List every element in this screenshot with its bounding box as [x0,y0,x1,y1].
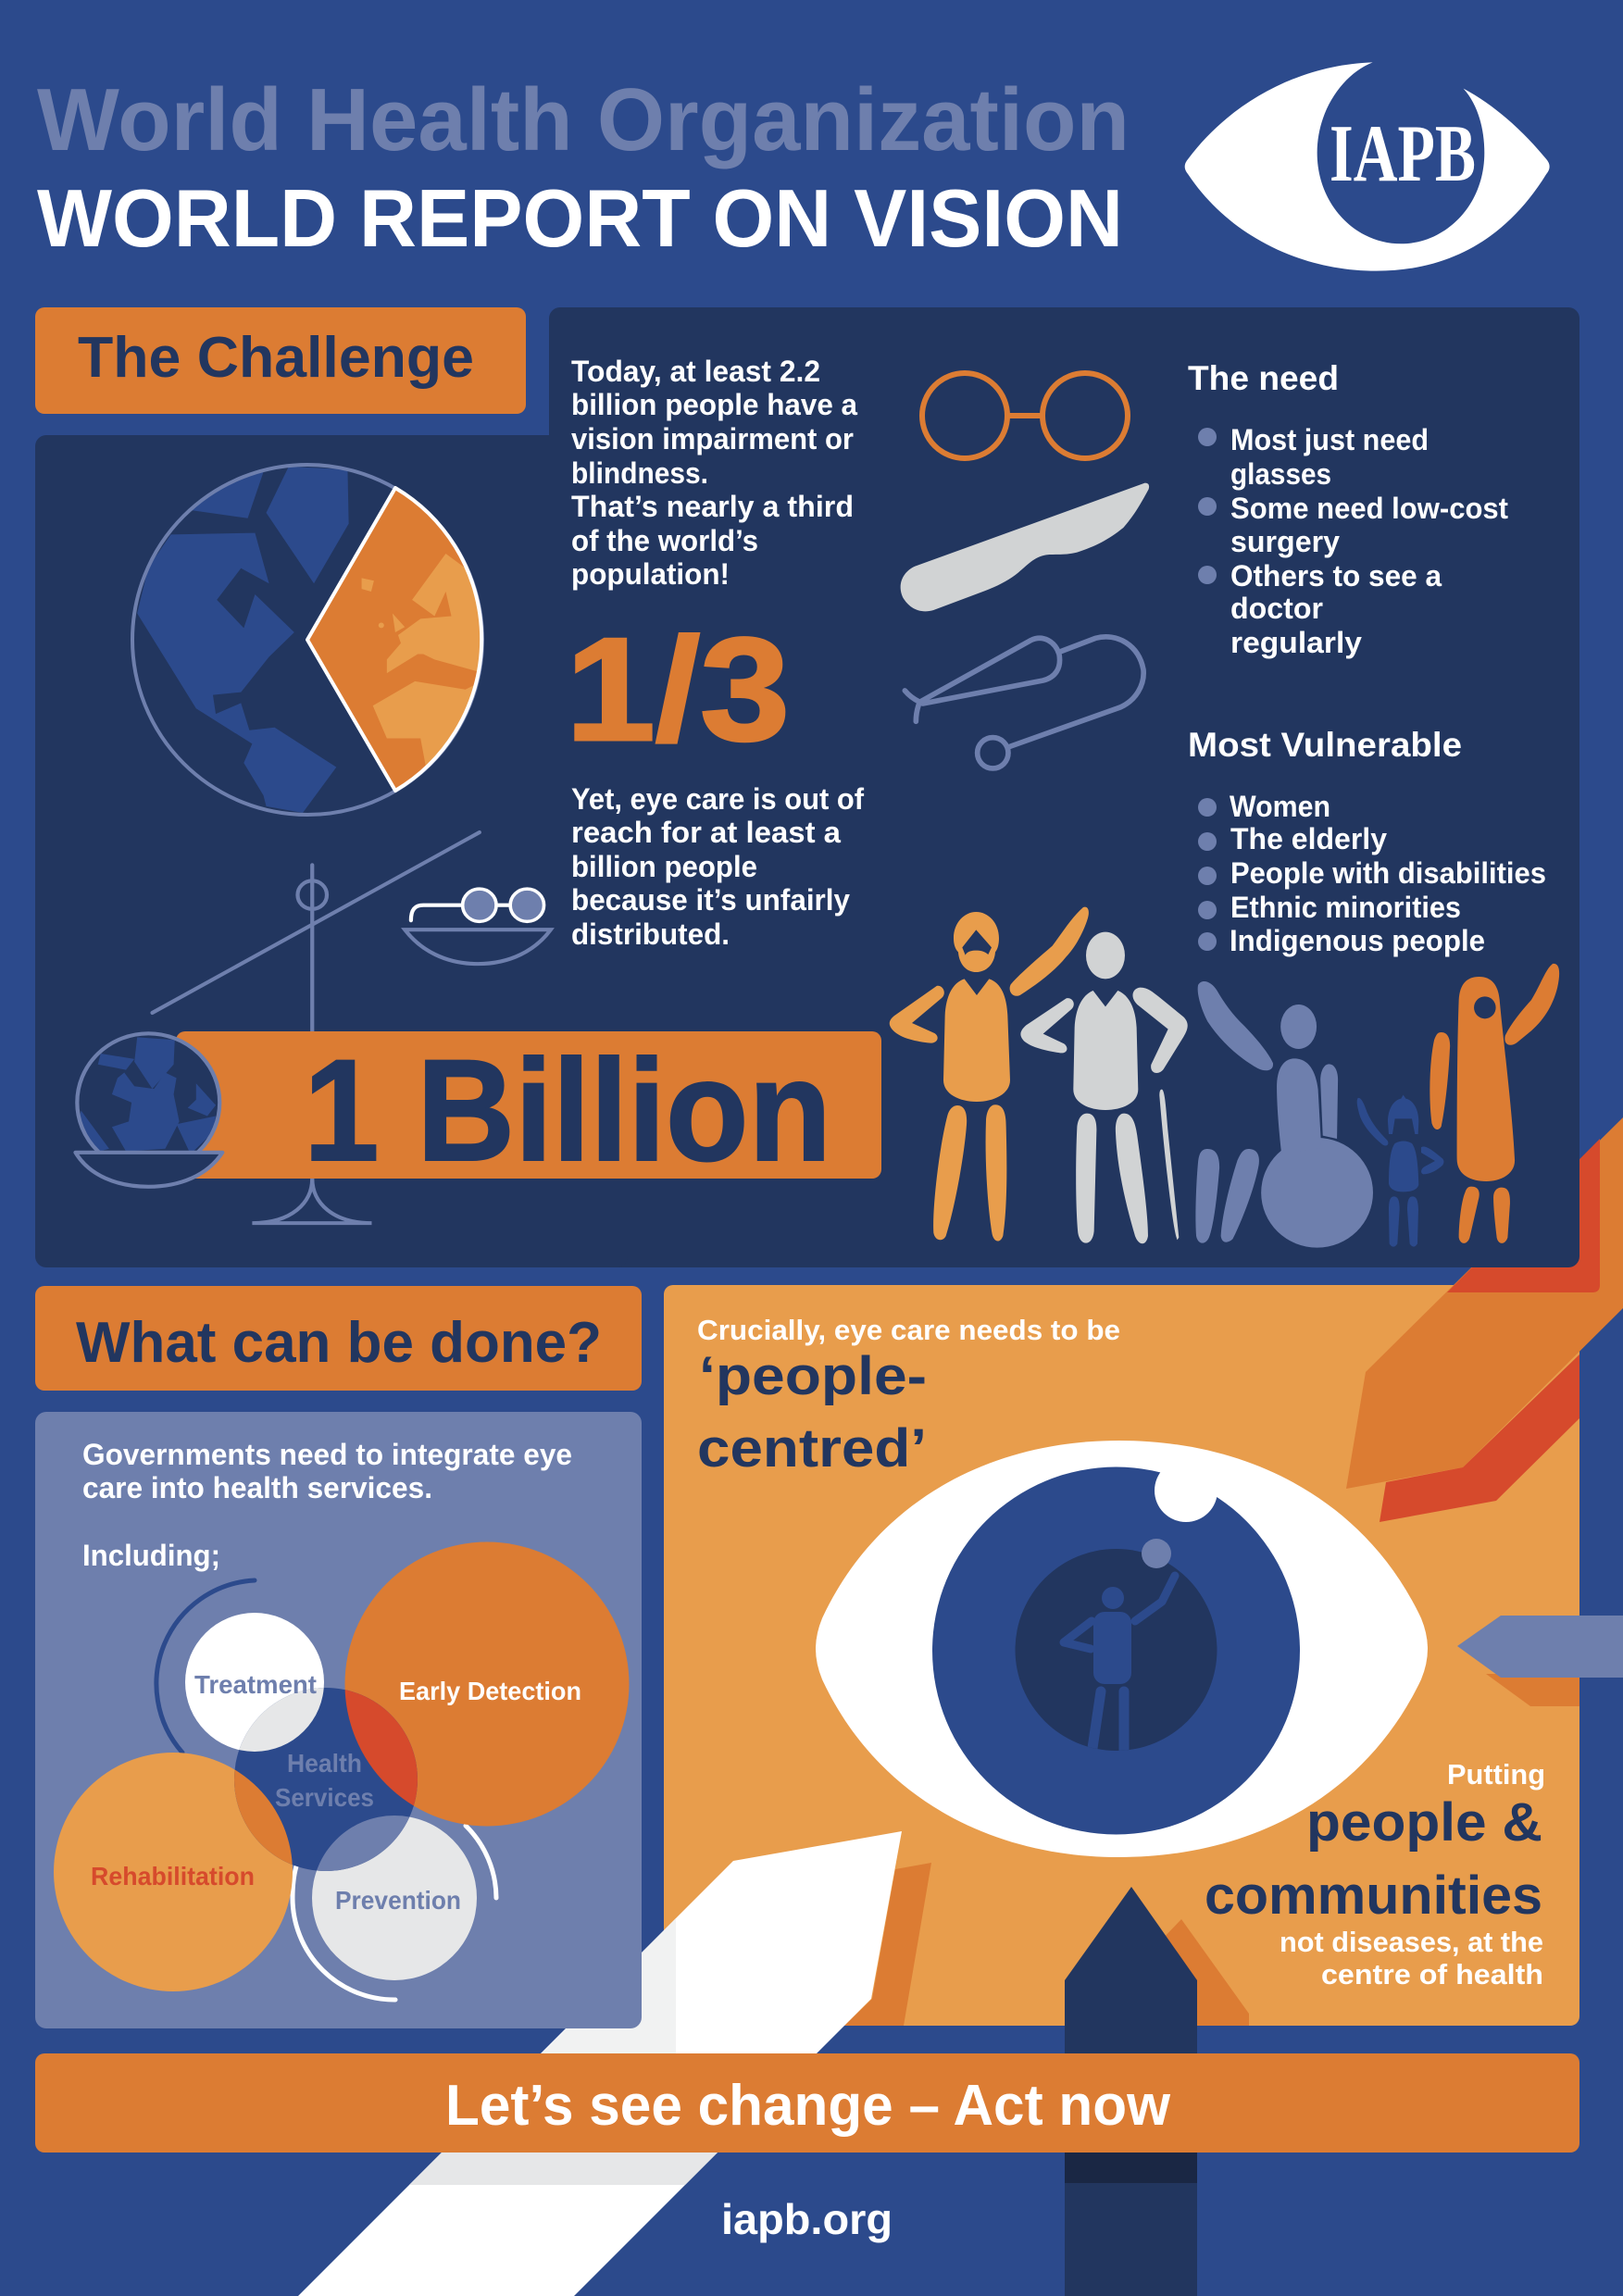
text block: the need: glasses [1230,457,1331,491]
text block: the need: Most just need [1230,423,1429,456]
text block: the need: regularly [1230,626,1362,659]
text block: people-centred: ‘people- [699,1346,927,1406]
panel: people-centred [664,1285,1579,2026]
banner: call to action [35,2053,1579,2152]
text block: most vulnerable: Women [1230,790,1330,823]
title: WORLD REPORT ON VISION [37,172,1123,264]
text block: most vulnerable: Ethnic minorities [1230,891,1461,924]
text block: the need: Others to see a [1230,559,1442,593]
chart: venn diagram of health services: Services [275,1783,374,1812]
icon: glasses [922,373,1128,458]
illustration: big eye [816,1441,1428,1857]
chart: venn diagram of health services: Rehabilitation [91,1862,255,1890]
text block: most vulnerable: The elderly [1230,822,1387,855]
icon: IAPB eye logo [1185,62,1550,271]
arrow: orange top right [1346,1117,1623,1489]
text block: out of reach: distributed. [571,917,730,951]
panel: what can be done [35,1412,642,2028]
icon: child [1357,1095,1443,1247]
text block: people-centred: Crucially, eye care needs to be [697,1314,1120,1346]
figure: one third: 1/3 [566,608,790,771]
icon: small globe on left pan [76,1033,222,1187]
illustration: group of people [890,907,1559,1248]
icon: man with turban [890,907,1089,1242]
text block: the need: doctor [1230,592,1323,625]
text block: most vulnerable: Indigenous people [1230,924,1485,957]
chart: venn diagram of health services [54,1542,630,2000]
icon: man with cane [1020,932,1188,1243]
text block: most vulnerable [1188,726,1546,957]
text block: people-centred: centred’ [697,1418,927,1479]
heading: What can be done? [35,1286,642,1391]
icon: small glasses on pan [411,889,544,921]
arrow: periwinkle shadow [1486,1674,1579,1706]
text block: two point two billion: That’s nearly a third [571,490,854,523]
text block: out of reach: because it’s unfairly [571,883,850,917]
arrow: red upper [1447,1139,1600,1292]
heading: The Challenge [35,307,526,414]
text block: out of reach: billion people [571,850,757,883]
arrow: navy arrow [1065,1887,1197,2296]
text block: people and communities: communities [1205,1866,1542,1926]
title: World Health Organization [37,70,1130,169]
arrow: red lower [1380,1354,1579,1522]
text block: the need: Some need low-cost [1230,492,1508,525]
panel: challenge dark background [35,307,1579,1267]
chart: venn diagram of health services: Prevention [335,1886,461,1915]
text block: governments: care into health services. [82,1471,432,1504]
text block: out of reach: reach for at least a [571,816,841,849]
text block: governments: Including; [82,1539,220,1572]
text block: people and communities [1205,1758,1545,1990]
text block: people and communities: people & [1306,1792,1542,1853]
callout: 1 Billion: 1 Billion [304,1030,831,1192]
chart: venn diagram of health services: Treatment [194,1670,317,1699]
text block: people and communities: not diseases, at the [1280,1926,1543,1958]
text block: people-centred [697,1314,1120,1479]
text block: two point two billion: population! [571,557,730,591]
text block: two point two billion: blindness. [571,456,708,490]
icon: person in pupil [1064,1576,1175,1754]
text block: governments: Governments need to integrate eye [82,1438,572,1471]
arrow: white arrow [298,1831,902,2296]
text block: two point two billion: billion people have a [571,388,857,421]
heading: The Challenge: The Challenge [78,326,474,390]
icon: right pan [405,930,551,964]
icon: woman in burqa [1429,964,1559,1243]
icon: scalpel [901,483,1149,611]
icon: stethoscope [905,637,1143,768]
text block: out of reach [571,782,864,951]
text block: governments [82,1438,572,1572]
text block: most vulnerable: People with disabilities [1230,856,1546,890]
website: iapb.org [721,2195,893,2243]
arrow: dark orange shadow of white arrow [844,1863,931,2026]
chart: globe with one third highlighted [132,465,493,815]
text block: the need: The need [1188,359,1339,397]
arrow: periwinkle arrow [1457,1616,1623,1678]
text block: two point two billion: Today, at least 2.2 [571,355,820,388]
text block: two point two billion: vision impairment or [571,422,854,455]
arrow: dark orange shadow of navy arrow [1157,1919,1249,2026]
text block: the need [1188,359,1508,659]
text block: out of reach: Yet, eye care is out of [571,782,864,816]
banner: call to action: Let’s see change – Act now [445,2074,1171,2138]
icon: person in wheelchair [1195,981,1373,1248]
chart: venn diagram of health services: Health [287,1749,362,1778]
icon: ball [1142,1539,1171,1568]
text block: two point two billion [571,355,857,591]
text block: two point two billion: of the world’s [571,524,758,557]
text block: people and communities: centre of health [1321,1958,1543,1990]
icon: IAPB eye logo: IAPB [1330,109,1476,199]
chart: balance scale [153,832,551,1223]
chart: venn diagram of health services: Early Detection [399,1677,581,1705]
heading: What can be done?: What can be done? [76,1311,602,1375]
text block: people and communities: Putting [1447,1758,1545,1791]
text block: the need: surgery [1230,525,1340,558]
text block: most vulnerable: Most Vulnerable [1188,726,1462,764]
title [37,70,1130,264]
